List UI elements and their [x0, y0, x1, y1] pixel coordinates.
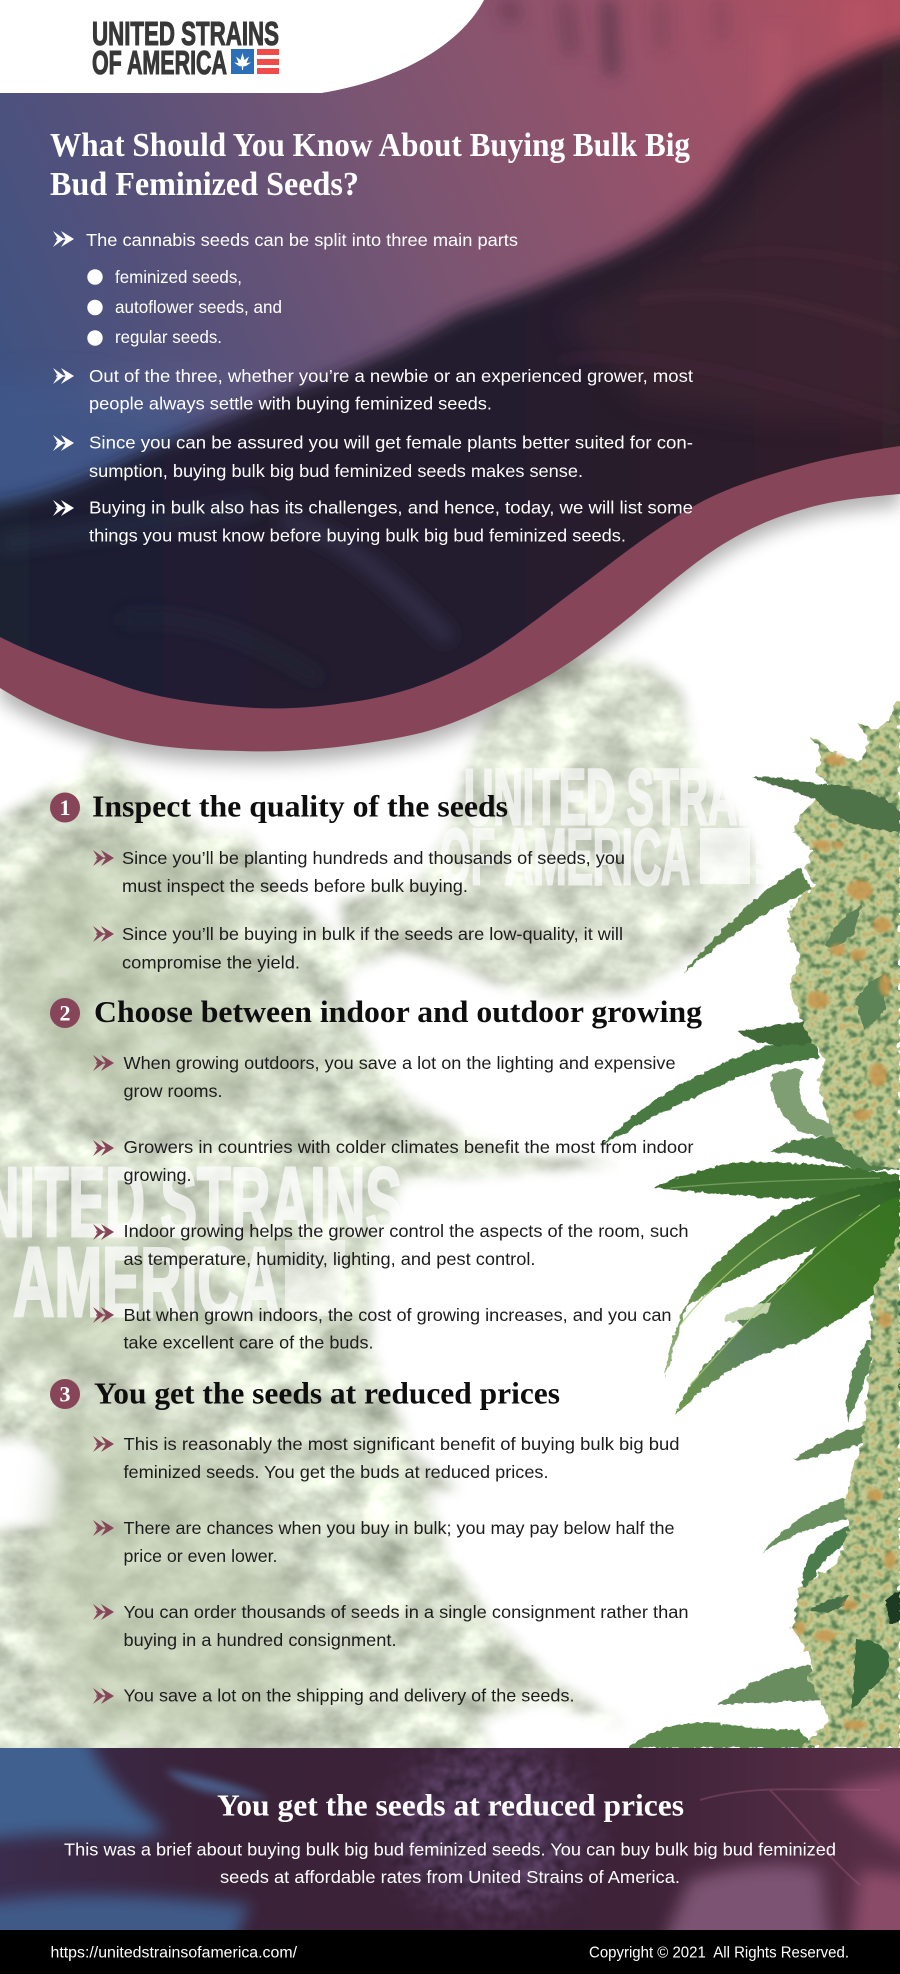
section 3 item: half price: price or even lower.	[124, 1546, 278, 1566]
footer copyright: Copyright © 2021 All Rights Reserved.	[589, 1944, 849, 1962]
wave band drop shadow	[0, 412, 900, 763]
hero sub-list: seed types: regular seeds.	[115, 327, 222, 347]
section 3 item: half price	[93, 1518, 674, 1566]
watermark: upper logo	[441, 768, 762, 886]
lower bud leaf 5	[628, 1722, 815, 1748]
fan leaf 3	[665, 1180, 900, 1378]
section 1 item: low quality: compromise the yield.	[122, 952, 300, 972]
background: faded cannabis plant and bud photos	[0, 655, 806, 1768]
ghost plant: darker leaf patches	[0, 830, 340, 1745]
number badge 3	[50, 1379, 80, 1409]
footer url: https://unitedstrainsofamerica.com/	[50, 1944, 298, 1962]
section 3 heading: You get the seeds at reduced prices	[94, 1376, 560, 1410]
small dark leaf	[738, 1020, 820, 1046]
section 2 item: colder climates: growing.	[124, 1165, 192, 1185]
section 2 item: indoor cost	[93, 1305, 672, 1352]
conclusion panel background	[0, 1748, 900, 1930]
logo: United Strains of America: UNITED STRAINS	[92, 15, 279, 52]
cannabis plant on right edge	[600, 700, 900, 1748]
section 2 item: indoor cost: take excellent care of the buds.	[124, 1332, 374, 1352]
hero sub-list: seed types	[87, 267, 282, 347]
ghost bud: center top	[340, 655, 760, 1000]
hero point: feminized preference: people always settle with buying feminized seeds.	[89, 394, 492, 414]
hero point: female plants	[53, 432, 693, 481]
blue patches	[0, 1730, 165, 1842]
hero point: female plants: sumption, buying bulk big bud feminized seeds makes sense.	[89, 461, 583, 481]
hero point: feminized preference: Out of the three, whether you’re a newbie or an experienced grower, most	[89, 366, 693, 386]
dark lower leaf	[879, 1290, 900, 1410]
bud dark leaflets	[752, 777, 900, 1710]
hero photo panel	[0, 0, 900, 780]
fan leaf 1	[770, 1137, 900, 1170]
footer bar	[0, 1930, 900, 1974]
section 2 item: colder climates: Growers in countries with colder climates benefit the most from indoor	[124, 1137, 694, 1157]
section 2 item: indoor control: Indoor growing helps the grower control the aspects of the room, such	[124, 1221, 688, 1241]
lower swooshes	[5, 500, 454, 644]
section 1 item: low quality: Since you’ll be buying in bulk if the seeds are low-quality, it will	[122, 924, 623, 944]
leaf highlight	[725, 1302, 770, 1322]
header wave band: plum	[0, 400, 900, 751]
leaf veins	[670, 1178, 880, 1385]
lower bud leaf 1	[793, 1425, 872, 1460]
section 3 item: benefit: feminized seeds. You get the buds at reduced prices.	[124, 1462, 548, 1482]
hero point: challenges: things you must know before buying bulk big bud feminized seeds.	[89, 526, 626, 546]
section 3 item: benefit	[93, 1434, 680, 1482]
section 1 item: planting: Since you’ll be planting hundreds and thousands of seeds, you	[122, 848, 625, 868]
long leaf top	[683, 868, 812, 973]
conclusion heading: You get the seeds at reduced prices	[217, 1788, 684, 1822]
section 2 item: indoor control: as temperature, humidity, lighting, and pest control.	[124, 1249, 536, 1269]
logo: United Strains of America	[92, 15, 279, 81]
lower bud leaf 2	[762, 1498, 848, 1553]
number badge 1: 1	[60, 795, 70, 820]
rose patches	[830, 1770, 900, 1860]
number badge 1	[50, 792, 80, 822]
conclusion text: seeds at affordable rates from United Strains of America.	[220, 1867, 680, 1887]
section 2 heading: Choose between indoor and outdoor growing	[94, 994, 703, 1029]
hero sub-list: seed types: autoflower seeds, and	[115, 297, 282, 317]
section 2 item: outdoors	[93, 1053, 676, 1101]
hero title	[50, 127, 690, 203]
central bud texture	[390, 1745, 590, 1915]
hero point: three main parts: The cannabis seeds can be split into three main parts	[86, 230, 518, 250]
fan leaf 4	[675, 1195, 900, 1415]
logo flag: canton with leaf	[231, 49, 254, 74]
section 3 item: shipping: You save a lot on the shipping and delivery of the seeds.	[124, 1686, 574, 1706]
hero point: feminized preference	[53, 366, 693, 414]
section 3 item: consignment: You can order thousands of seeds in a single consignment rather than	[124, 1602, 688, 1622]
section 2 item: outdoors: grow rooms.	[124, 1081, 222, 1101]
hero point: challenges	[53, 498, 693, 546]
conclusion text	[64, 1840, 836, 1887]
upper bud	[788, 700, 900, 1170]
number badge 2: 2	[60, 1000, 70, 1026]
leaf veins	[700, 1789, 880, 1885]
hero title: What Should You Know About Buying Bulk Big	[50, 127, 690, 164]
dark ridge	[0, 30, 900, 780]
lower bud leaf 3	[803, 1522, 860, 1590]
section 1 heading: Inspect the quality of the seeds	[92, 788, 508, 824]
section 3 item: half price: There are chances when you buy in bulk; you may pay below half the	[124, 1518, 674, 1538]
conclusion text: This was a brief about buying bulk big bud feminized seeds. You can buy bulk big bud feminized	[64, 1840, 836, 1860]
ring leaf	[771, 1069, 835, 1140]
soft blue mist	[102, 415, 175, 442]
hero point: female plants: Since you can be assured you will get female plants better suited for con-	[89, 432, 693, 452]
watermark: lower logo	[0, 1166, 400, 1318]
bud orange pistils	[795, 754, 896, 1730]
hero point: challenges: Buying in bulk also has its challenges, and hence, today, we will list some	[89, 498, 693, 518]
hero sub-list: seed types: feminized seeds,	[115, 267, 242, 287]
section 3 item: benefit: This is reasonably the most significant benefit of buying bulk big bud	[124, 1434, 680, 1454]
section 1 item: low quality	[93, 924, 623, 972]
section 1 item: planting: must inspect the seeds before bulk buying.	[122, 876, 468, 896]
logo flag: stripes	[257, 49, 279, 55]
number badge 2	[50, 998, 80, 1028]
section 2 item: indoor control	[93, 1221, 688, 1269]
waterfall streaks	[496, 0, 776, 105]
section 1 item: planting	[93, 848, 625, 896]
maroon tone over the ridge	[576, 118, 888, 412]
right bud strip	[865, 1235, 900, 1430]
header white logo corner	[0, 0, 484, 93]
lower bud leaf 4	[717, 1665, 825, 1705]
section 2 item: indoor cost: But when grown indoors, the cost of growing increases, and you can	[124, 1305, 672, 1325]
lower bud	[792, 1400, 900, 1748]
plant leaves	[600, 868, 900, 1748]
fan leaf 2	[653, 1162, 900, 1198]
section 3 item: consignment	[93, 1602, 688, 1650]
logo: United Strains of America: OF AMERICA	[92, 44, 227, 81]
section 2 item: colder climates	[93, 1137, 694, 1185]
hero title: Bud Feminized Seeds?	[50, 166, 359, 203]
number badge 3: 3	[60, 1382, 70, 1406]
thin lower leaf	[847, 1340, 878, 1422]
section 3 item: consignment: buying in a hundred consignment.	[124, 1630, 396, 1650]
section 2 item: outdoors: When growing outdoors, you save a lot on the lighting and expensive	[124, 1053, 676, 1073]
ridge highlights	[560, 251, 900, 420]
long leaf middle	[600, 1040, 820, 1147]
ghost plant: left mass	[0, 738, 631, 1768]
